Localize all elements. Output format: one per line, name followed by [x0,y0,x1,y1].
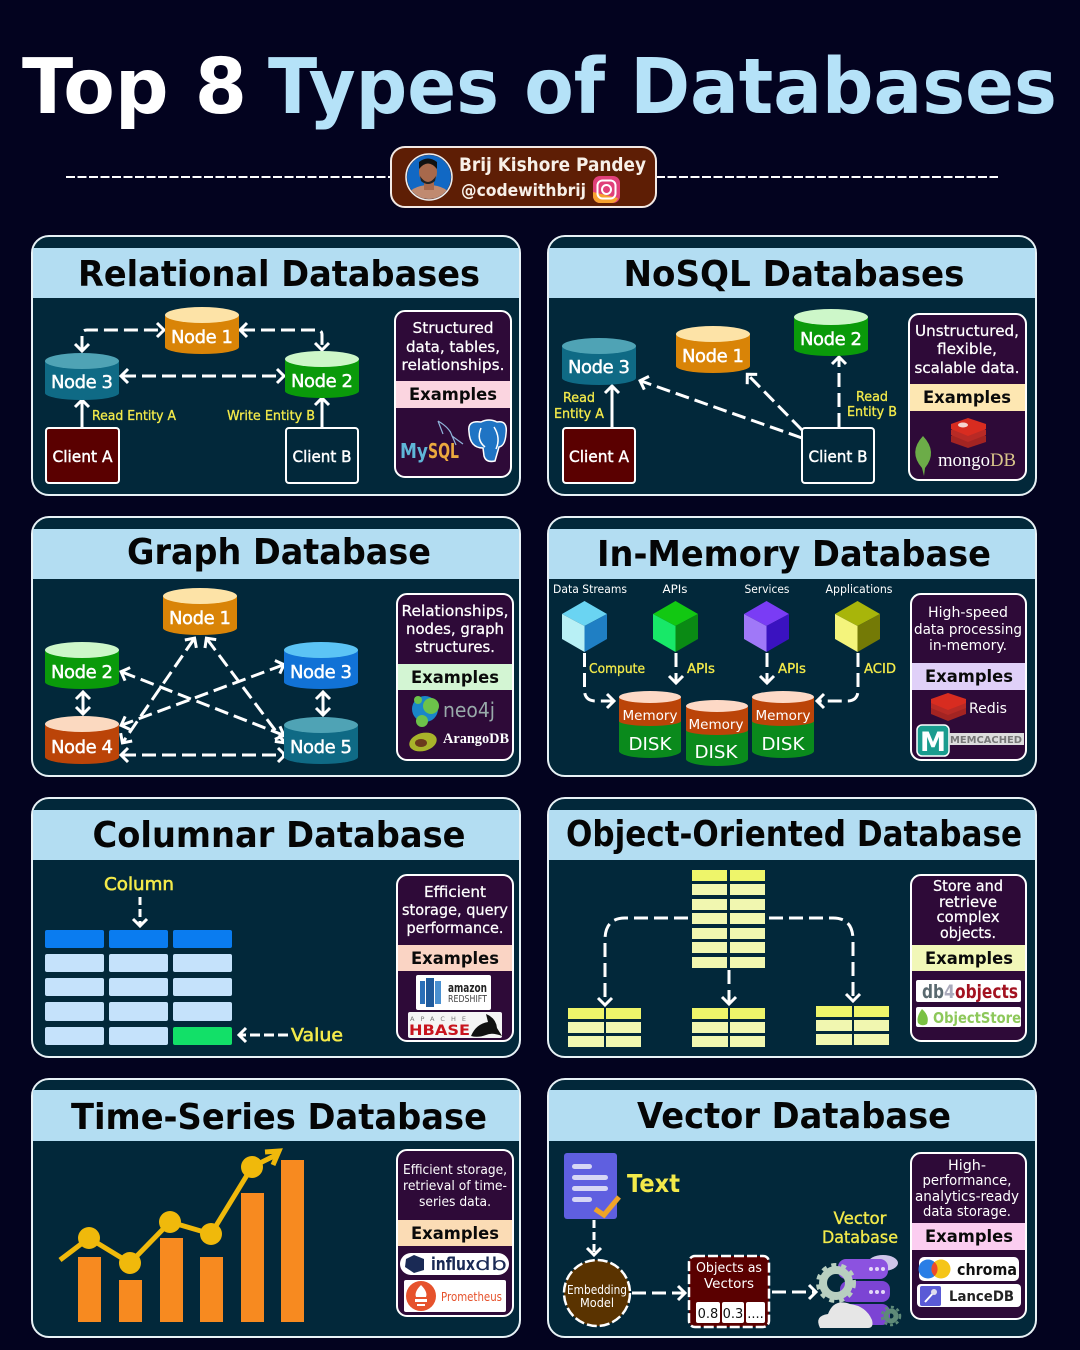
logo: neo4j: neo4j [443,698,495,722]
info box: Examples [411,668,499,688]
info box: in-memory. [929,638,1007,654]
info box: analytics-ready [915,1189,1019,1205]
node 3: Node 3 [568,357,630,378]
label: Entity A [554,407,604,422]
memory disk cylinder 3: Memory [756,708,811,724]
node 3 [284,642,358,689]
logo: objectstore: ObjectStore [933,1009,1021,1027]
label: text: Text [627,1169,680,1198]
node 2: Node 2 [800,329,862,350]
logo: db4objects [916,980,1021,1003]
source labels [553,582,893,596]
objects as vectors: .... [747,1307,764,1322]
arrow [592,1220,596,1254]
info box: complex [936,908,1000,926]
client a: Client A [569,447,629,466]
heading: In-Memory Database [597,534,991,575]
logo: redis [951,418,986,448]
embedding model: Model [580,1295,614,1310]
logo: arangodb: ArangoDB [443,731,509,747]
info box: High-speed [928,605,1008,621]
icon: server with gear and cloud [818,1255,900,1328]
client b [286,428,358,483]
source labels: Services [744,582,790,596]
label: Entity B [847,405,897,420]
flow labels: APIs [687,662,715,677]
info box [397,594,513,760]
logo: mysql [400,421,463,463]
node 1 [163,588,237,635]
label: Write Entity B [227,409,315,424]
info box: storage, query [402,901,508,919]
arrows [584,653,858,701]
arrows [83,639,323,755]
info box: Structured [412,319,494,337]
panel: vector database [548,1079,1036,1337]
client b [802,428,874,483]
info box: objects. [940,924,996,942]
info box: flexible, [937,340,997,358]
node 3: Node 3 [51,372,113,393]
info box [395,311,511,477]
heading: Vector Database [637,1096,951,1137]
embedding model [564,1260,630,1326]
node 1 [676,326,750,373]
node 5 [284,717,358,764]
logo: redis: Redis [969,701,1007,717]
source labels: Data Streams [553,582,627,596]
info box: relationships. [402,356,504,374]
node 3 [562,338,636,385]
info box: Examples [411,949,499,969]
arrows [82,330,322,427]
label: column: Column [104,874,174,895]
logo: prometheus [404,1280,506,1312]
logo: influxdb [400,1253,509,1275]
logo: db4objects: db [922,981,944,1003]
icon: instagram [593,176,620,203]
info box [911,1153,1026,1319]
info box: Examples [925,949,1013,969]
logo: mongodb [915,436,1016,476]
flow labels: Compute [589,662,645,677]
heading: NoSQL Databases [624,254,964,295]
cube: services [744,601,789,652]
arrows [612,358,839,438]
heading: Columnar Database [92,815,466,856]
label: vector database: Database [822,1228,898,1248]
logo: db4objects: 4 [944,981,955,1003]
info box: Efficient storage, [403,1162,507,1178]
label: Read Entity A [92,409,176,424]
memory disk cylinder 2: Memory [688,717,744,733]
objects as vectors [689,1256,769,1327]
logo: influxdb: influx [431,1254,475,1275]
info box: retrieval of time- [403,1178,507,1194]
label: Read [856,390,888,405]
logo: redshift: REDSHIFT [448,994,487,1005]
bar chart [78,1160,304,1322]
info box: Examples [923,388,1011,408]
top object stack [692,870,765,968]
heading: Relational Databases [78,254,480,295]
objects as vectors: 0.3 [723,1307,743,1322]
column table [45,930,232,1045]
heading: Graph Database [127,532,431,573]
logo: memcached: MEMCACHED [950,735,1022,746]
objects as vectors: Vectors [704,1277,754,1292]
logo: prometheus: Prometheus [441,1289,502,1304]
panel: relational databases [32,236,520,495]
client b: Client B [292,447,352,466]
info box: series data. [419,1194,491,1210]
node 2: Node 2 [291,371,353,392]
logo: mysql: My [400,439,428,463]
info box: Examples [925,1227,1013,1247]
icon: document [564,1153,619,1219]
client a: Client A [52,447,113,466]
author badge: Brij Kishore Pandey [459,154,647,176]
memory disk cylinder 1 [619,691,681,758]
cube: data streams [562,601,607,652]
info box [911,594,1026,760]
flow labels: APIs [778,662,806,677]
node 2 [285,351,359,398]
client a [563,428,635,483]
arrow [632,1292,684,1294]
label [847,390,897,420]
node 2 [45,642,119,689]
trend line [60,1151,279,1274]
memory disk cylinder 3 [752,691,814,758]
node 3: Node 3 [290,662,352,683]
author badge: @codewithbrij [461,181,586,201]
memory disk cylinder 1: Memory [622,708,678,724]
memory disk cylinder 1: DISK [628,734,673,755]
info box: data, tables, [406,338,500,356]
info box: structures. [415,638,495,656]
label: vector database [822,1209,898,1248]
info box: retrieve [939,893,997,911]
embedding model: Embedding [567,1282,627,1297]
author badge [391,147,656,211]
objects as vectors: Objects as [696,1261,762,1276]
title: Top 8 [22,43,247,132]
info box [911,875,1026,1041]
logo: objectstore [916,1007,1021,1027]
logo: lancedb [917,1284,1021,1307]
logo: influxdb: db [475,1254,507,1275]
node 5: Node 5 [290,737,352,758]
heading: Time-Series Database [71,1097,487,1138]
panel: object-oriented database [548,798,1036,1057]
memory disk cylinder 2: DISK [694,742,739,763]
flow labels [589,662,896,677]
logo: postgresql [469,420,506,461]
logo: memcached [917,725,1024,758]
info box: Efficient [424,883,486,901]
label: value: Value [291,1025,343,1046]
info box [397,1150,513,1316]
client b: Client B [808,447,868,466]
logo: chroma: chroma [957,1260,1017,1279]
node 2 [794,309,868,356]
memory disk cylinder 2 [686,700,748,766]
logo: lancedb: LanceDB [949,1289,1014,1305]
node 3 [45,353,119,400]
label: Read [563,391,595,406]
info box: Relationships, [402,602,508,620]
flow labels: ACID [864,662,896,677]
node 1: Node 1 [169,608,231,629]
objects as vectors: 0.8 [698,1307,718,1322]
panel: nosql databases [548,236,1036,495]
source labels: APIs [662,582,688,596]
memory disk cylinder 3: DISK [762,734,806,755]
info box: Store and [933,877,1003,895]
info box: nodes, graph [406,620,504,638]
bottom stack left [568,1008,641,1047]
logo: hbase: APACHE [410,1015,466,1023]
info box [909,314,1026,480]
info box: data processing [914,622,1022,638]
logo: mysql: SQL [428,439,459,463]
logo: redshift [416,975,491,1010]
node 1: Node 1 [682,346,744,367]
logo: memcached: M [920,727,946,758]
heading: Object-Oriented Database [566,814,1022,855]
node 1 [165,307,239,354]
logo: mongodb: DB [990,450,1016,471]
node 1: Node 1 [171,327,233,348]
logo: arangodb [407,730,509,754]
info box: Examples [925,667,1013,687]
panel: columnar database [32,798,520,1057]
client a [46,428,119,483]
logo: db4objects: objects [955,981,1018,1003]
info box: scalable data. [914,359,1020,377]
source labels: Applications [826,582,893,596]
arrow [772,1290,815,1294]
cube: apis [653,601,698,652]
logo: neo4j [412,696,495,727]
info box: High- [948,1158,986,1174]
logo: mongodb: mongo [938,450,990,471]
info box [397,875,513,1041]
panel: in-memory database [548,517,1036,776]
logo: hbase: HBASE [409,1023,470,1039]
panel: time-series database [32,1079,520,1337]
node 4 [45,716,119,764]
info box: data storage. [923,1204,1011,1220]
logo: redshift: amazon [448,980,487,995]
node 4: Node 4 [51,737,113,758]
node 2: Node 2 [51,662,113,683]
panel: graph database [32,517,520,776]
arrows [605,918,853,1004]
icon: author avatar [407,155,451,199]
logo: redis [931,693,1007,721]
label [554,391,604,422]
arrow [138,897,142,925]
label: vector database: Vector [834,1209,887,1229]
info box: Examples [409,385,497,405]
cube: applications [835,601,880,652]
logo: chroma [918,1257,1019,1281]
info box: performance. [406,919,504,937]
logo: hbase [408,1012,502,1039]
info box: performance, [922,1173,1012,1189]
info box: Unstructured, [915,322,1019,340]
info box: Examples [411,1224,499,1244]
arrow [240,1034,288,1036]
bottom stack centre [692,1008,765,1047]
bottom stack right [816,1006,889,1045]
